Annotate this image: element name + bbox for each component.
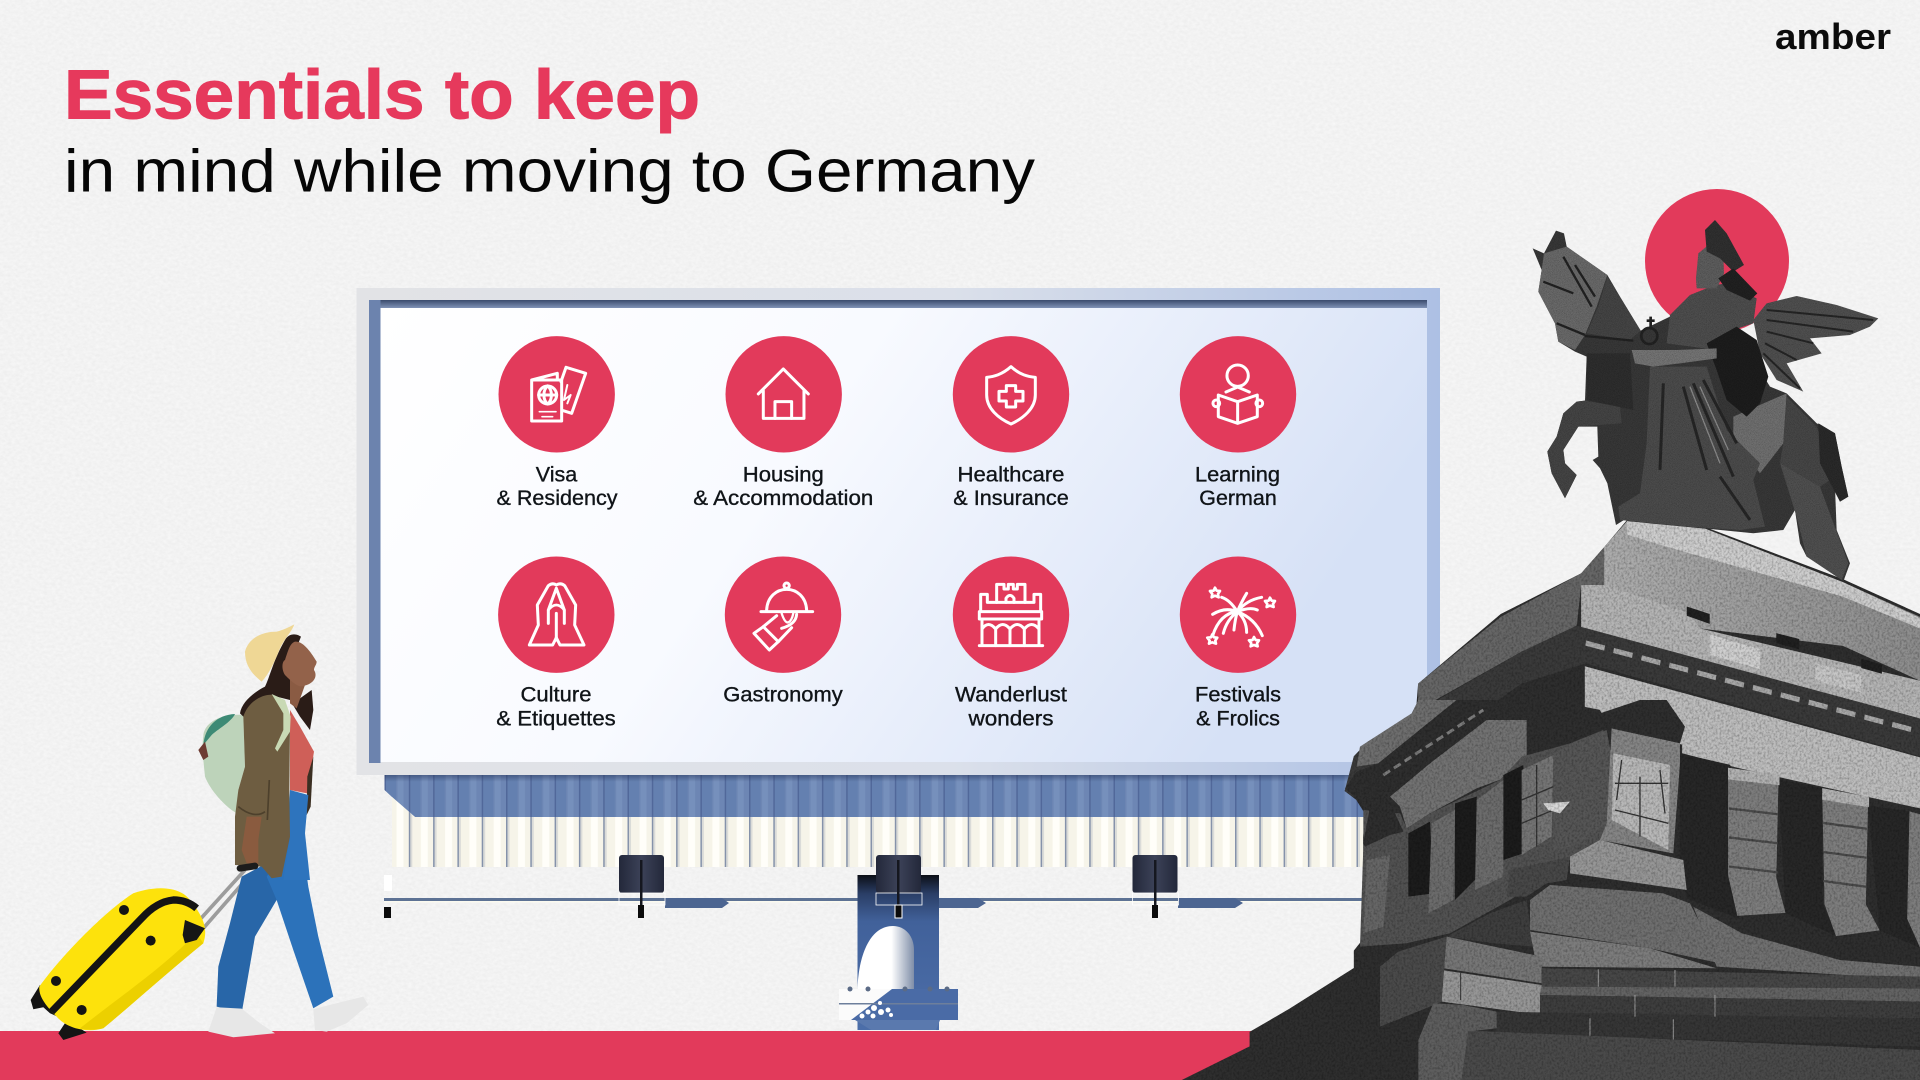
horse neck xyxy=(1587,277,1641,340)
hind leg xyxy=(1780,463,1848,580)
label xyxy=(1195,684,1281,731)
strap xyxy=(52,900,197,1012)
item: Visa & Residency xyxy=(496,336,618,510)
arm roll xyxy=(1632,348,1717,367)
pole highlight dome xyxy=(858,926,914,990)
left frieze xyxy=(1390,720,1527,828)
roof band xyxy=(1357,700,1457,767)
jeans waist xyxy=(283,790,310,880)
corrugated back panel: cream xyxy=(392,797,1372,867)
red sun circle xyxy=(1645,189,1789,333)
label: Healthcare xyxy=(958,464,1064,487)
statue: equestrian figure with winged genius xyxy=(1533,220,1878,582)
item: Healthcare & Insurance xyxy=(953,336,1069,510)
lower left base xyxy=(1447,857,1570,947)
corner pier with relief xyxy=(1600,700,1685,853)
horse head and mane xyxy=(1538,247,1607,350)
handle mount xyxy=(183,920,205,943)
label: wonders xyxy=(967,708,1054,731)
cornice xyxy=(1345,626,1920,800)
forearm and hand xyxy=(242,817,262,865)
bracket right xyxy=(1132,855,1178,918)
logo: amber: amber xyxy=(1775,16,1891,57)
item: Gastronomy xyxy=(723,556,843,707)
label: & Accommodation xyxy=(693,487,873,510)
robe folds xyxy=(1660,380,1750,520)
corrugated shading under frame xyxy=(384,775,1372,817)
left cornice xyxy=(1345,700,1527,802)
label xyxy=(496,464,618,510)
dark cloak xyxy=(1707,327,1768,417)
backpack pocket xyxy=(203,714,235,745)
billboard panel xyxy=(356,288,1440,775)
rivets xyxy=(51,905,156,1015)
left inner shadow xyxy=(369,300,380,763)
corrugated back panel: blue xyxy=(384,775,1372,817)
shoes xyxy=(208,997,368,1037)
label xyxy=(955,684,1067,731)
item: Wanderlust wonders xyxy=(953,556,1069,731)
handle grip xyxy=(240,866,255,868)
stairs xyxy=(1497,968,1920,1047)
torso xyxy=(1667,283,1757,350)
horse silhouette xyxy=(1533,231,1850,582)
label xyxy=(1195,464,1280,510)
icon: castle xyxy=(953,556,1069,673)
icon: praying hands xyxy=(498,556,614,673)
monument: Kaiser Wilhelm pedestal xyxy=(1182,520,1920,1080)
label: Gastronomy xyxy=(723,684,843,707)
icon: house xyxy=(726,336,842,452)
jacket xyxy=(235,695,290,878)
bracket left xyxy=(619,855,665,918)
raised foreleg xyxy=(1547,401,1622,498)
pedestal silhouette xyxy=(1182,520,1920,1080)
upper body xyxy=(198,624,317,880)
rough rock xyxy=(1418,1003,1497,1080)
jacket inner edge xyxy=(307,757,313,815)
strap xyxy=(272,694,291,752)
frieze xyxy=(1585,666,1920,808)
saddle cloth xyxy=(1733,393,1787,473)
lattice panel xyxy=(1522,755,1570,855)
label: Visa xyxy=(536,464,578,487)
horse chest xyxy=(1587,353,1633,410)
right piers and openings xyxy=(1680,753,1920,948)
label xyxy=(693,464,873,510)
label xyxy=(953,464,1069,510)
bridle details xyxy=(1543,257,1633,341)
pole base plate xyxy=(839,986,958,1030)
title line: Essentials to keep: Essentials to keep xyxy=(64,56,700,134)
upper plinth xyxy=(1418,521,1920,727)
bracket centre xyxy=(876,855,922,918)
hair xyxy=(240,634,313,730)
label: Wanderlust xyxy=(955,684,1067,707)
red ground band xyxy=(0,1031,1260,1080)
billboard screen xyxy=(380,308,1427,762)
head xyxy=(1696,245,1724,288)
hat xyxy=(245,624,294,682)
shirt xyxy=(290,710,314,793)
label: & Residency xyxy=(496,487,618,510)
rock courses xyxy=(1530,885,1920,980)
big step xyxy=(1462,1031,1920,1080)
label xyxy=(496,684,616,731)
billboard support structure xyxy=(384,775,1372,1030)
pedestal lower storeys and steps xyxy=(1345,700,1920,1080)
title xyxy=(64,56,1035,204)
neck xyxy=(290,680,305,708)
left wall xyxy=(1360,730,1607,947)
corner mass xyxy=(1553,730,1612,850)
item: Festivals & Frolics xyxy=(1180,556,1296,731)
tail xyxy=(1818,423,1848,502)
backpack buckle xyxy=(198,742,208,760)
label: Culture xyxy=(520,684,592,707)
traveller with suitcase xyxy=(31,624,368,1040)
icon: passport and visa xyxy=(498,336,615,452)
collar xyxy=(1718,268,1757,301)
top inner shadow xyxy=(369,300,1427,308)
robe of genius xyxy=(1618,367,1765,530)
icon: person reading book xyxy=(1180,336,1296,452)
front leg xyxy=(267,790,333,1008)
icon: fireworks xyxy=(1180,556,1296,673)
suitcase and legs xyxy=(31,790,368,1040)
telescopic handle xyxy=(195,870,250,928)
item: Learning German xyxy=(1180,336,1296,510)
face xyxy=(282,642,317,686)
horse rump xyxy=(1780,397,1835,487)
catwalk rail xyxy=(384,875,1366,918)
billboard frame xyxy=(356,288,1440,775)
left windows xyxy=(1408,765,1523,900)
relief lion xyxy=(1363,798,1403,847)
wheels xyxy=(31,985,87,1040)
plume xyxy=(1705,220,1744,272)
label: Learning xyxy=(1195,464,1280,487)
label: & Etiquettes xyxy=(496,708,616,731)
subtitle line: in mind while moving to Germany: in mind while moving to Germany xyxy=(64,138,1035,204)
label: Festivals xyxy=(1195,684,1281,707)
lower block xyxy=(1380,937,1542,1027)
crown xyxy=(1641,317,1657,344)
central pole xyxy=(858,875,939,1030)
pedestal upper storeys xyxy=(1182,520,1920,1080)
shell shade xyxy=(80,933,203,1030)
icon: hand with cloche xyxy=(725,556,841,673)
label: German xyxy=(1199,487,1277,510)
label: Housing xyxy=(743,464,824,487)
label: & Insurance xyxy=(953,487,1069,510)
label: & Frolics xyxy=(1196,708,1280,731)
shell xyxy=(39,888,205,1030)
left piers xyxy=(1428,780,1503,913)
backpack xyxy=(203,715,245,813)
sleeve fold xyxy=(238,780,269,820)
pier base xyxy=(1570,840,1687,890)
item: Housing & Accommodation xyxy=(693,336,873,510)
rear leg xyxy=(217,863,287,1013)
item: Culture & Etiquettes xyxy=(496,556,616,731)
relief plaque xyxy=(1363,855,1390,933)
icon: shield with cross xyxy=(953,336,1069,452)
wing xyxy=(1753,296,1878,392)
